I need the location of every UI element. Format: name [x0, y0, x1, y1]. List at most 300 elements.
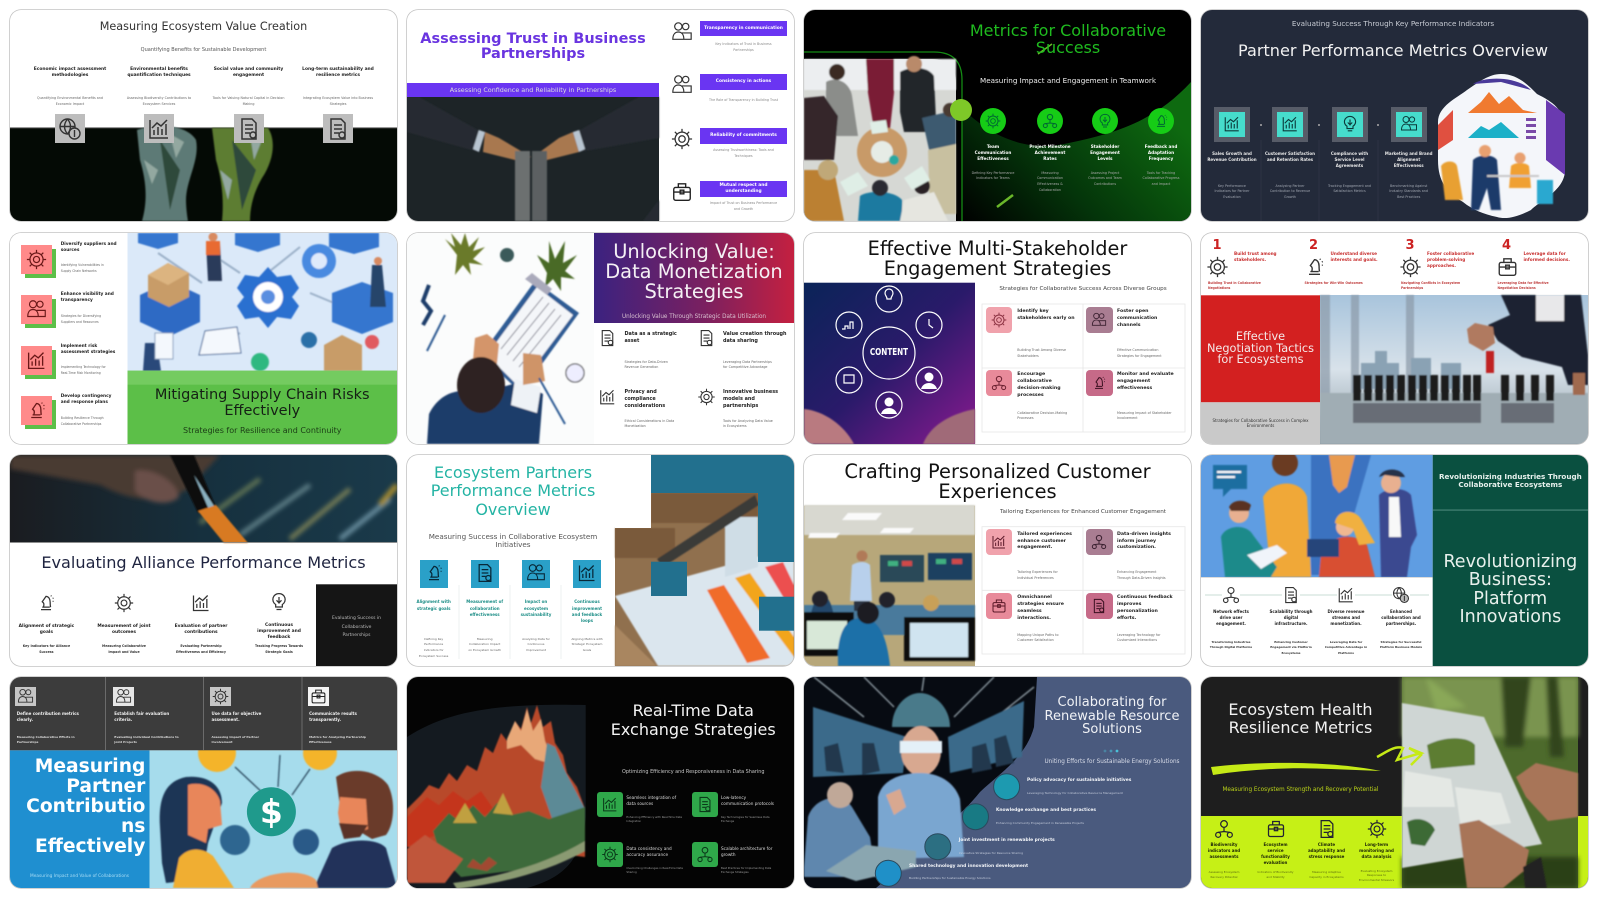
item: communicate results — [308, 687, 396, 747]
image: hands holding report in the forest — [1201, 677, 1588, 888]
item: diversify suppliers: Diversify suppliers and — [61, 242, 117, 247]
item 2: understand interests: Understand diverse — [1330, 251, 1377, 256]
item: data consistency — [597, 842, 689, 876]
item: implement risk assessment: Implement risk — [61, 344, 97, 349]
item: encourage collaborative decisions: Collaborative Decision-Making — [1017, 411, 1067, 415]
item: develop contingency: Develop contingency — [61, 394, 111, 399]
item: define metrics — [15, 687, 103, 747]
item: data as asset — [602, 330, 677, 369]
item: low latency: communication protocols — [721, 801, 774, 806]
item: enhanced collaboration — [1374, 585, 1428, 659]
item: transparency: Key Indicators of Trust in Business — [715, 42, 772, 46]
item: scalability: Engagement via Platform — [1270, 645, 1312, 649]
item: social value: Tools for Valuing Natural Capital in Decision — [213, 96, 284, 100]
item: foster open communication — [1086, 307, 1183, 367]
slide: Assessing Trust in Business Partnerships — [407, 10, 794, 221]
subtitle: Strategies for Collaborative Success in Complex — [1212, 418, 1309, 423]
title — [970, 20, 1166, 56]
image: negotiator placing a red figure — [1201, 233, 1588, 444]
item: partner contributions — [164, 591, 238, 659]
item: develop contingency: and response plans — [61, 400, 108, 405]
item: service evaluation: and Stability — [1266, 875, 1285, 879]
item: tailored experiences: enhance customer — [1017, 538, 1066, 544]
title — [1433, 553, 1588, 626]
item: strategic goals — [410, 560, 458, 660]
icon: document — [234, 114, 264, 143]
subtitle: Strategies for Collaborative Success Across Diverse Groups — [999, 286, 1167, 292]
header text: Collaborative Ecosystems — [1458, 480, 1562, 489]
item: define metrics: Measuring Collaborative Efforts in — [17, 735, 75, 739]
item: sales growth — [1207, 107, 1257, 199]
item: climate adaptability: Capacity in Ecosystems — [1309, 875, 1344, 879]
item: monitor engagement: engagement — [1117, 379, 1150, 384]
item: define metrics: Partnerships — [17, 740, 38, 744]
item: encourage collaborative decisions: processes — [1017, 393, 1044, 398]
title — [407, 464, 619, 520]
item: environmental benefits: Environmental benefits — [130, 67, 188, 72]
item: ecosystem sustainability: Improvement — [526, 648, 546, 652]
icon tile — [597, 792, 623, 817]
item: continuous improvement: Goals — [583, 648, 591, 652]
item: strategic goals: Key Indicators for Alliance — [23, 644, 70, 648]
item: continuous improvement: improvement and — [257, 629, 301, 634]
title: Resilience Metrics — [1229, 718, 1372, 737]
icon: gear bulb — [269, 592, 289, 612]
item: value creation: Leveraging Data Partnerships — [723, 360, 772, 364]
item: implement risk assessment: Real-Time Risk Monitoring — [61, 371, 101, 375]
item 4: leverage data: Leveraging Data for Effective — [1498, 281, 1549, 285]
item: continuous feedback: Customized Interactions — [1117, 638, 1157, 642]
item: tailored experiences: Tailoring Experiences for — [1017, 570, 1058, 574]
image: two partners and coin illustration — [10, 677, 397, 888]
item: data as asset: Strategies for Data-Driven — [624, 360, 668, 364]
item 1: build trust: Negotiations — [1208, 286, 1230, 290]
item: milestones: Achievement — [1035, 150, 1065, 155]
item 3: collaborative problem solving: approaches. — [1427, 263, 1456, 268]
item: enhance visibility: Enhance visibility and — [61, 292, 114, 297]
icon: globe coin — [1392, 585, 1410, 605]
title: Collaborating for — [1058, 695, 1166, 710]
title: Unlocking Value: — [613, 240, 775, 263]
slide: Ecosystem Health Resilience Metrics — [1201, 677, 1588, 888]
title: Partner Performance Metrics Overview — [1238, 41, 1548, 60]
item: enhanced collaboration: collaboration and — [1381, 615, 1421, 620]
image: collaborating team illustration — [1201, 455, 1588, 666]
icon circle — [980, 108, 1006, 134]
subtitle: Environments — [1247, 423, 1274, 428]
item: marketing: Effectiveness — [1394, 163, 1424, 168]
item: scalability: Enhancing Customer — [1274, 640, 1308, 644]
item: identify stakeholders: Building Trust Among Diverse — [1017, 348, 1066, 352]
label bar: understanding — [725, 189, 762, 194]
image: chart on wooden desk — [407, 455, 794, 666]
item: shared technology: Building Partnerships for Sustainable Energy Solutions — [909, 876, 991, 880]
item: network effects: drive user — [1220, 615, 1242, 620]
item: data-driven insights: Through Data-Driven Insights — [1117, 576, 1166, 580]
image: 3D data landscape — [407, 677, 794, 888]
item: innovative models: Tools for Analyzing Data Value — [723, 419, 773, 423]
item: communicate results: Communicate results — [309, 711, 357, 716]
icon: clipboard — [323, 114, 353, 143]
item: ecosystem sustainability: Impact on — [525, 599, 547, 604]
item: innovative models: models and — [723, 396, 755, 402]
item 1: build trust: Build trust among — [1234, 251, 1277, 256]
item: monitor engagement: effectiveness — [1117, 386, 1152, 391]
subtitle: Tailoring Experiences for Enhanced Customer Engagement — [1000, 508, 1166, 514]
item: economic impact: Quantifying Environmental Benefits and — [37, 96, 103, 100]
item: data-driven insights: customization. — [1117, 545, 1156, 550]
item: communicate results: transparently. — [309, 717, 341, 722]
item: enhance visibility: Suppliers and Resources — [61, 320, 99, 324]
label bar — [700, 128, 787, 144]
item: social value: Social value and community — [214, 67, 283, 72]
item 4: leverage data: Leverage data for — [1524, 251, 1566, 256]
item: foster open communication: channels — [1117, 323, 1141, 328]
icon: chess knight on pink tile — [21, 396, 56, 429]
title: Performance Metrics — [431, 481, 595, 500]
item: ecosystem sustainability: Continuous — [528, 642, 544, 646]
item: collaboration effectiveness: Collaboration Impact — [469, 642, 500, 646]
item: monitor engagement: Involvement — [1117, 416, 1138, 420]
subtitle: Measuring Success in Collaborative Ecosystem — [429, 532, 597, 540]
title: Engagement Strategies — [884, 257, 1111, 280]
item: transparency — [672, 21, 787, 52]
item: stakeholder engagement: Stakeholder — [1091, 144, 1119, 149]
item: ecosystem sustainability: Analyzing Data for — [522, 637, 550, 641]
item: privacy: Privacy and — [624, 389, 657, 395]
item: sales growth: Revenue Contribution — [1207, 157, 1257, 162]
slide: Unlocking Value: Data Monetization Strategies — [407, 233, 794, 444]
item: marketing: Industry Standards and — [1389, 189, 1428, 193]
item: policy advocacy: Policy advocacy for sustainable initiatives — [1027, 778, 1131, 783]
item: milestones: Collaboration — [1039, 188, 1061, 192]
item: continuous improvement: Strategic Goals — [265, 650, 293, 654]
text: CONTENT label: CONTENT — [870, 347, 908, 358]
icon: network — [1222, 585, 1240, 605]
item: seamless integration: Integration — [626, 819, 641, 823]
item: encourage collaborative decisions: Encourage — [1017, 372, 1045, 377]
item: continuous improvement: and feedback — [572, 612, 602, 617]
icon: device — [1316, 819, 1336, 839]
item: fair evaluation: Evaluating Individual Contributions to — [114, 735, 179, 739]
title: Effective — [1236, 330, 1285, 343]
item: continuous feedback: improves — [1117, 602, 1141, 607]
item: environmental benefits: quantification techniques — [127, 73, 191, 78]
subtitle — [1201, 418, 1320, 429]
item: collaboration effectiveness: Measurement of — [466, 599, 503, 604]
item: stakeholder engagement: Outcomes and Team — [1088, 176, 1122, 180]
item 3: collaborative problem solving: Foster collaborative — [1427, 251, 1474, 256]
item: tailored experiences: Individual Preferences — [1017, 576, 1054, 580]
icon: storefront — [1496, 256, 1518, 278]
item: service evaluation: functionality — [1261, 854, 1290, 859]
icon tile — [1086, 593, 1112, 619]
image: team in a circle and green wave — [804, 43, 1191, 221]
title: Mitigating Supply Chain Risks — [155, 386, 370, 402]
item: continuous improvement: improvement — [572, 606, 602, 610]
item: service evaluation: evaluation — [1264, 860, 1287, 865]
item 1: build trust: stakeholders. — [1234, 257, 1266, 262]
image: handshake over stone pillars — [407, 96, 660, 221]
item: long-term monitoring: Responses to — [1367, 873, 1386, 877]
item: strategic goals: goals — [40, 630, 53, 635]
item: knowledge exchange: Knowledge exchange and best practices — [996, 808, 1096, 813]
item: reliability: Assessing Trustworthiness: Tools and — [713, 148, 774, 152]
item: innovative models — [696, 388, 786, 433]
label bar: Reliability of commitments — [710, 133, 777, 138]
title: Revolutionizing — [1443, 552, 1577, 572]
item: define metrics: clearly. — [17, 717, 33, 722]
title: ns — [121, 816, 145, 837]
item: service evaluation — [1250, 819, 1300, 885]
icon: map on pink tile — [21, 346, 56, 379]
item: joint outcomes: Measurement of joint — [97, 624, 151, 629]
item: feedback: Collaborative Progress — [1143, 176, 1179, 180]
item: feedback: Feedback and — [1145, 144, 1177, 149]
icon circle — [1148, 108, 1174, 134]
item: marketing — [1385, 107, 1432, 199]
icon: network — [1214, 819, 1234, 839]
item: continuous improvement: feedback — [268, 635, 290, 640]
icon: stopwatch — [1366, 819, 1386, 839]
item: data-driven insights: Data-driven insights — [1117, 532, 1171, 537]
title: Experiences — [938, 480, 1057, 503]
item: diversify suppliers: Supply Chain Networks — [61, 269, 97, 273]
slide: Effective Multi-Stakeholder Engagement Strategies — [804, 233, 1191, 444]
item: enhance visibility: Strategies for Diversifying — [61, 314, 101, 318]
item: strategic goals: Alignment with — [416, 599, 451, 604]
title: Partner — [66, 776, 145, 797]
title — [1201, 331, 1320, 366]
item 2: understand interests: 2 — [1309, 238, 1318, 253]
title: Strategies — [644, 280, 744, 303]
item: data-driven insights: inform journey — [1117, 538, 1156, 544]
item: scalable architecture: growth — [721, 852, 736, 857]
item: omnichannel strategies — [986, 593, 1083, 653]
item: milestones: Effectiveness & — [1037, 182, 1063, 186]
item: long-term sustainability — [302, 66, 374, 143]
item: identify stakeholders: stakeholders early on — [1017, 316, 1075, 321]
title: Overview — [475, 500, 551, 519]
icon text: dollar sign: $ — [260, 792, 283, 831]
title: Business: — [1469, 570, 1552, 590]
icon: people — [672, 22, 692, 40]
item: tailored experiences: engagement. — [1017, 545, 1052, 550]
item: scalability: digital — [1284, 615, 1298, 620]
slide: Collaborating for Renewable Resource Solutions — [804, 677, 1191, 888]
item: biodiversity: indicators and — [1208, 848, 1240, 853]
item: collaboration effectiveness: on Ecosystem Growth — [468, 648, 501, 652]
slide: Evaluating Alliance Performance Metrics — [10, 455, 397, 666]
title — [155, 386, 370, 419]
item: data-driven insights: Enhancing Engagement — [1117, 570, 1156, 574]
item: climate adaptability: Measuring Adaptive — [1312, 870, 1341, 874]
title: Measuring Ecosystem Value Creation — [100, 20, 307, 33]
item: strategic goals: strategic goals — [417, 606, 451, 610]
item 3: collaborative problem solving — [1399, 239, 1489, 291]
item: continuous improvement: Strategic Ecosystem — [572, 642, 602, 646]
item: collaboration effectiveness — [461, 560, 509, 660]
icon tile — [1214, 107, 1250, 142]
item: monitor engagement — [1086, 370, 1183, 430]
item: climate adaptability: Climate — [1318, 842, 1335, 847]
item: feedback: Adaptation — [1148, 150, 1174, 155]
item: shared technology: Shared technology and innovation development — [909, 864, 1028, 869]
title: Exchange Strategies — [611, 720, 776, 739]
item: customer satisfaction — [1265, 107, 1315, 199]
title: Assessing Trust in Business — [420, 30, 646, 46]
item: mutual respect: and Growth — [734, 207, 753, 211]
item: innovative models: Innovative business — [723, 389, 778, 395]
item: customer satisfaction: and Retention Rates — [1267, 157, 1313, 162]
item: continuous feedback: Leveraging Technology for — [1117, 633, 1160, 637]
item: long-term sustainability: resilience metrics — [316, 73, 360, 78]
item: scalability: infrastructure. — [1274, 621, 1308, 626]
item: objective data: Use data for objective — [212, 711, 261, 716]
item: omnichannel strategies: seamless — [1017, 609, 1042, 614]
item: feedback: Tools for Tracking — [1147, 171, 1175, 175]
item: compliance — [1328, 107, 1371, 193]
item: privacy: compliance — [624, 396, 656, 402]
item: innovative models: in Ecosystems — [723, 424, 747, 428]
item: biodiversity — [1199, 819, 1249, 885]
item: enhanced collaboration: Platform Business Models — [1380, 645, 1422, 649]
item: diverse revenue — [1319, 585, 1373, 659]
item: foster open communication: Strategies for Engagement — [1117, 354, 1162, 358]
item: data-driven insights — [1086, 529, 1183, 589]
item: continuous improvement: loops — [581, 618, 593, 623]
item: policy advocacy — [994, 774, 1144, 800]
title — [1201, 700, 1400, 738]
item: value creation: Value creation through — [723, 331, 787, 337]
header text: Revolutionizing Industries Through — [1439, 472, 1582, 480]
item 4: leverage data: Negotiation Decisions — [1498, 286, 1536, 290]
item: seamless integration: Enhancing Efficiency with Real-Time Data — [626, 815, 682, 819]
item 3: collaborative problem solving: Navigating Conflicts in Ecosystem — [1401, 281, 1460, 285]
item: scalable architecture: Scalable architecture for — [721, 846, 772, 851]
icon tile — [308, 687, 329, 706]
subtitle: Measuring Ecosystem Strength and Recovery Potential — [1222, 786, 1378, 792]
item: policy advocacy: Leveraging Technology for Collaborative Resource Management — [1027, 791, 1123, 795]
item: reliability: Techniques — [734, 154, 753, 158]
callout text — [316, 615, 397, 641]
item: enhanced collaboration: partnerships. — [1386, 621, 1416, 626]
item 3: collaborative problem solving: problem-solving — [1427, 257, 1465, 262]
item: seamless integration: Seamless integration of — [626, 795, 676, 800]
slide: Measuring Ecosystem Value Creation — [10, 10, 397, 221]
item: environmental benefits: Assessing Biodiversity Contributions to — [127, 96, 191, 100]
item: enhanced collaboration: Strategies for Successful — [1381, 640, 1421, 644]
icon tile — [986, 370, 1012, 396]
item: encourage collaborative decisions: Processes — [1017, 416, 1034, 420]
icon: briefcase — [673, 183, 691, 201]
icon tile — [113, 687, 134, 706]
item: continuous improvement — [242, 591, 316, 659]
item: foster open communication: Foster open — [1117, 309, 1148, 314]
item: objective data — [210, 687, 298, 747]
item: shared technology — [875, 860, 1025, 886]
icon: air conditioner — [1266, 819, 1286, 839]
icon circle — [1092, 108, 1118, 134]
item: biodiversity: Assessing Ecosystem — [1209, 870, 1239, 874]
item: ecosystem sustainability: ecosystem — [524, 606, 548, 610]
item: identify stakeholders: Stakeholders — [1017, 354, 1039, 358]
item: joint outcomes: Measuring Collaborative — [102, 644, 146, 648]
item: continuous improvement — [563, 560, 611, 660]
title: Real-Time Data — [633, 701, 754, 720]
item: economic impact: Economic impact assessment — [34, 67, 106, 72]
icon: tablet — [1282, 585, 1300, 605]
item: data consistency: Sharing — [626, 870, 637, 874]
item 4: leverage data: 4 — [1502, 238, 1511, 253]
item: diverse revenue: streams and — [1332, 615, 1360, 620]
item: continuous improvement: Continuous — [574, 599, 600, 604]
title: Solutions — [1082, 722, 1142, 737]
item: economic impact: methodologies — [52, 73, 88, 78]
item: service evaluation: service — [1267, 848, 1284, 853]
item: team communication: Team — [987, 144, 999, 149]
slide: Measuring Partner Contributions Effectively — [10, 677, 397, 888]
title: Measuring — [35, 756, 145, 777]
item: climate adaptability: adaptability and — [1308, 848, 1345, 853]
item: strategic goals: Alignment of strategic — [19, 624, 74, 629]
item: team communication: Defining Key Performance — [972, 171, 1014, 175]
item: ecosystem sustainability: sustainability — [521, 612, 551, 617]
item: tailored experiences — [986, 529, 1083, 589]
item: omnichannel strategies: Customer Satisfaction — [1017, 638, 1054, 642]
item: reliability — [672, 128, 787, 158]
subtitle: Quantifying Benefits for Sustainable Development — [141, 47, 266, 53]
item: service evaluation: Indicators of Biodiversity — [1258, 870, 1293, 874]
title: Metrics for Collaborative — [970, 20, 1166, 40]
slide: Mitigating Supply Chain Risks Effectively — [10, 233, 397, 444]
item: feedback: Frequency — [1149, 156, 1173, 161]
item: team communication: Indicators for Teams — [976, 176, 1010, 180]
icon tile — [986, 593, 1012, 619]
item: social value — [212, 66, 284, 143]
label bar: Consistency in actions — [716, 79, 771, 84]
item: data as asset: asset — [624, 338, 639, 344]
icon tile — [15, 687, 36, 706]
item: seamless integration — [597, 792, 689, 826]
item: sales growth: Key Performance — [1218, 184, 1246, 188]
subtitle: Measuring Impact and Value of Collaborations — [30, 874, 129, 879]
icon tile — [210, 687, 231, 706]
item: enhance visibility: transparency — [61, 298, 93, 303]
item: implement risk assessment: Implementing Technology for — [61, 365, 106, 369]
item: diverse revenue: Platforms — [1338, 651, 1354, 655]
item: collaboration effectiveness: Measuring — [477, 637, 492, 641]
title: Success — [1036, 38, 1100, 56]
item: privacy: Monetization — [624, 424, 646, 428]
item: value creation — [696, 329, 786, 374]
item: milestones: Rates — [1043, 156, 1057, 161]
icon tile — [1086, 307, 1112, 333]
item 1: build trust — [1206, 239, 1296, 291]
title: Effectively — [35, 836, 145, 857]
item: economic impact — [34, 66, 106, 143]
item 2: understand interests: Strategies for Win-Win Outcomes — [1304, 281, 1363, 285]
item: network effects: engagement. — [1216, 621, 1246, 626]
item: diversify suppliers: Identifying Vulnerabilities in — [61, 263, 104, 267]
icon tile — [522, 560, 550, 588]
item: define metrics: Define contribution metrics — [17, 711, 79, 716]
title: Innovations — [1459, 607, 1561, 627]
icon tile — [986, 529, 1012, 555]
item: partner contributions: Effectiveness and Efficiency — [176, 650, 226, 654]
item: develop contingency — [21, 394, 112, 429]
title: Ecosystem Partners — [434, 462, 592, 482]
